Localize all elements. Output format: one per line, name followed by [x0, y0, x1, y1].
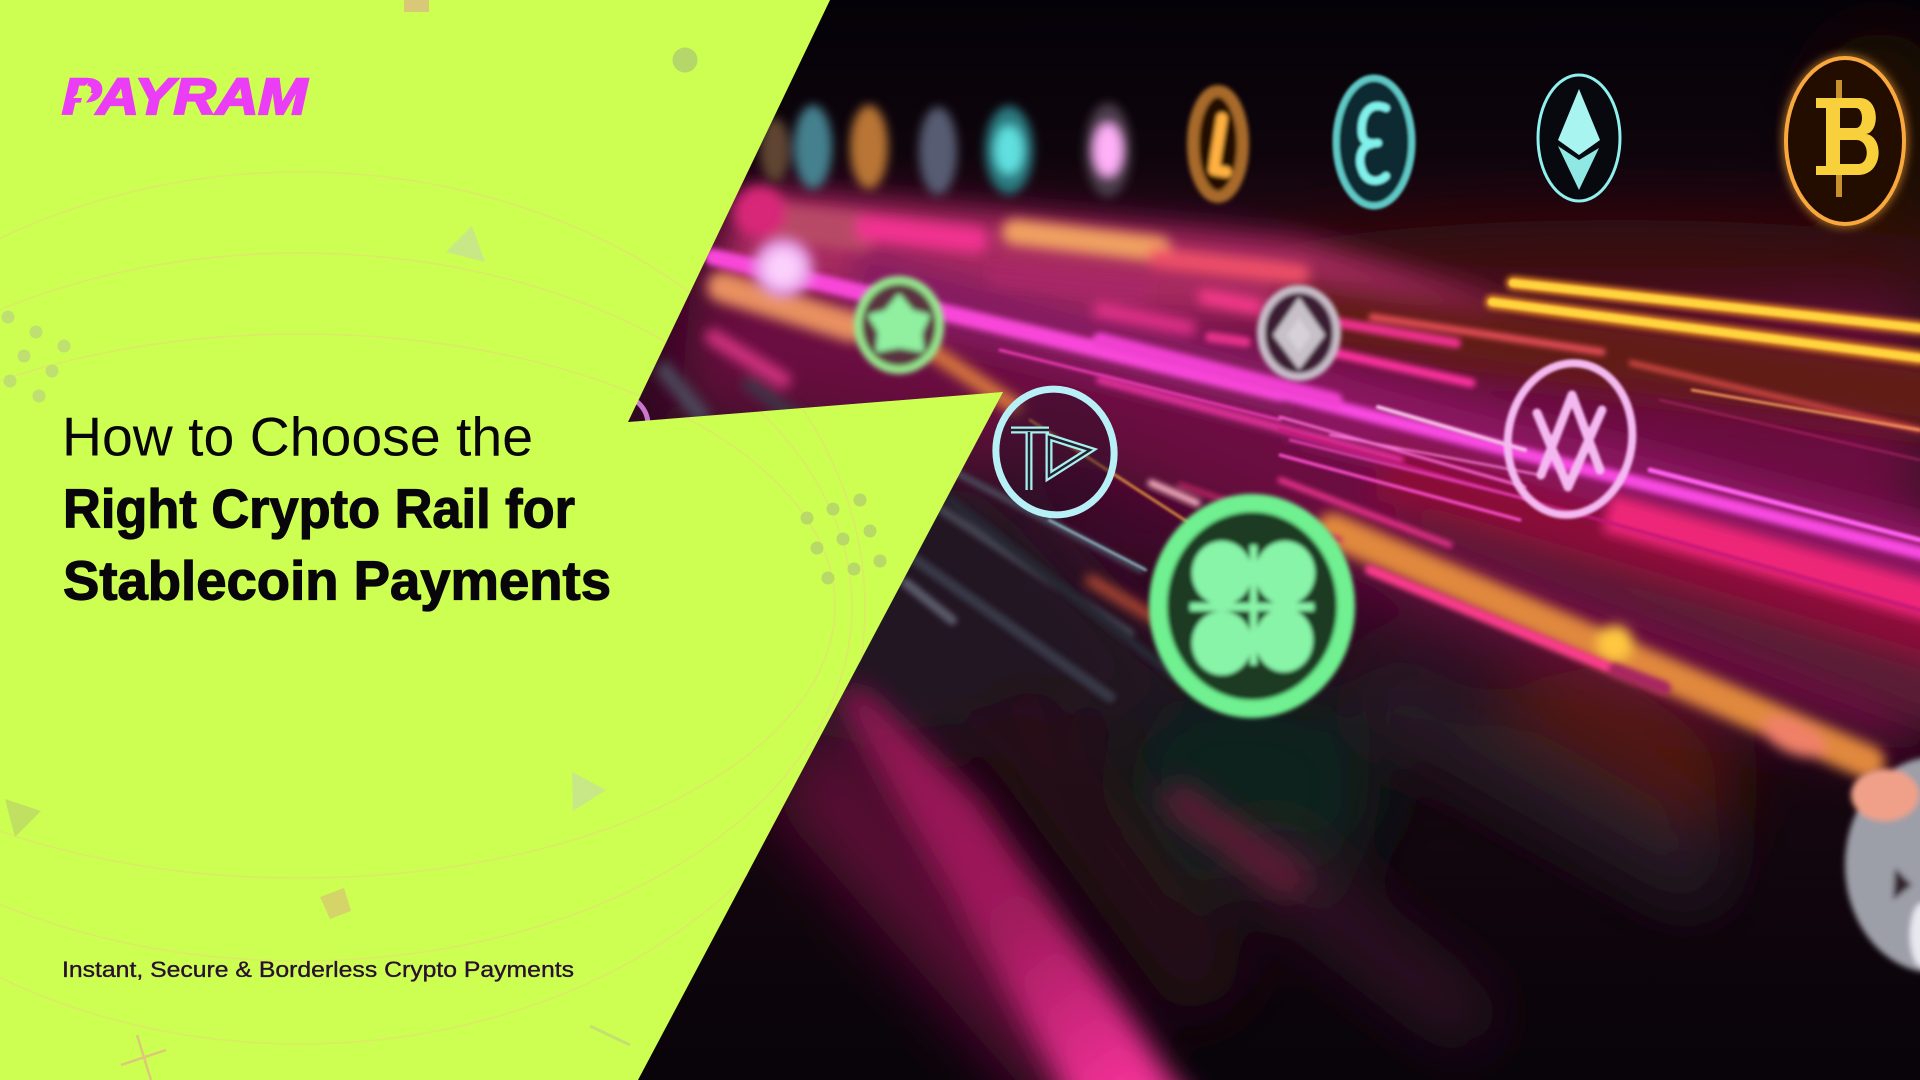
coin: ethereum	[1538, 75, 1620, 201]
blurred coin row, far left	[760, 103, 1131, 197]
coin: large green clover	[1158, 503, 1346, 709]
heading: Right Crypto Rail for	[63, 478, 575, 540]
sharp neon streaks	[713, 257, 1920, 697]
streak haze band	[640, 30, 1920, 1080]
broad magenta fill	[720, 190, 1920, 1080]
coin: teal euro	[1336, 78, 1412, 206]
tagline: Instant, Secure & Borderless Crypto Payments	[62, 957, 574, 982]
coin: pink double A	[1498, 355, 1642, 523]
coin: blurred grey, right edge	[1845, 757, 1920, 973]
coin: TD teal outline	[986, 380, 1124, 524]
heading: How to Choose the	[62, 406, 533, 468]
lime panel	[0, 0, 1003, 1080]
coin: green star	[858, 280, 940, 370]
decorative arcs and confetti on the lime panel	[0, 0, 886, 1080]
logo: PAYRAM: PAYRAM	[62, 68, 309, 125]
heading	[62, 406, 611, 612]
coin: grey diamond	[1261, 289, 1337, 377]
heading: Stablecoin Payments	[63, 550, 611, 612]
blurred pink orb	[753, 238, 813, 298]
coin: bitcoin	[1786, 58, 1904, 224]
coin: litecoin	[1193, 91, 1243, 197]
small purple coin edge by the notch	[588, 395, 648, 455]
